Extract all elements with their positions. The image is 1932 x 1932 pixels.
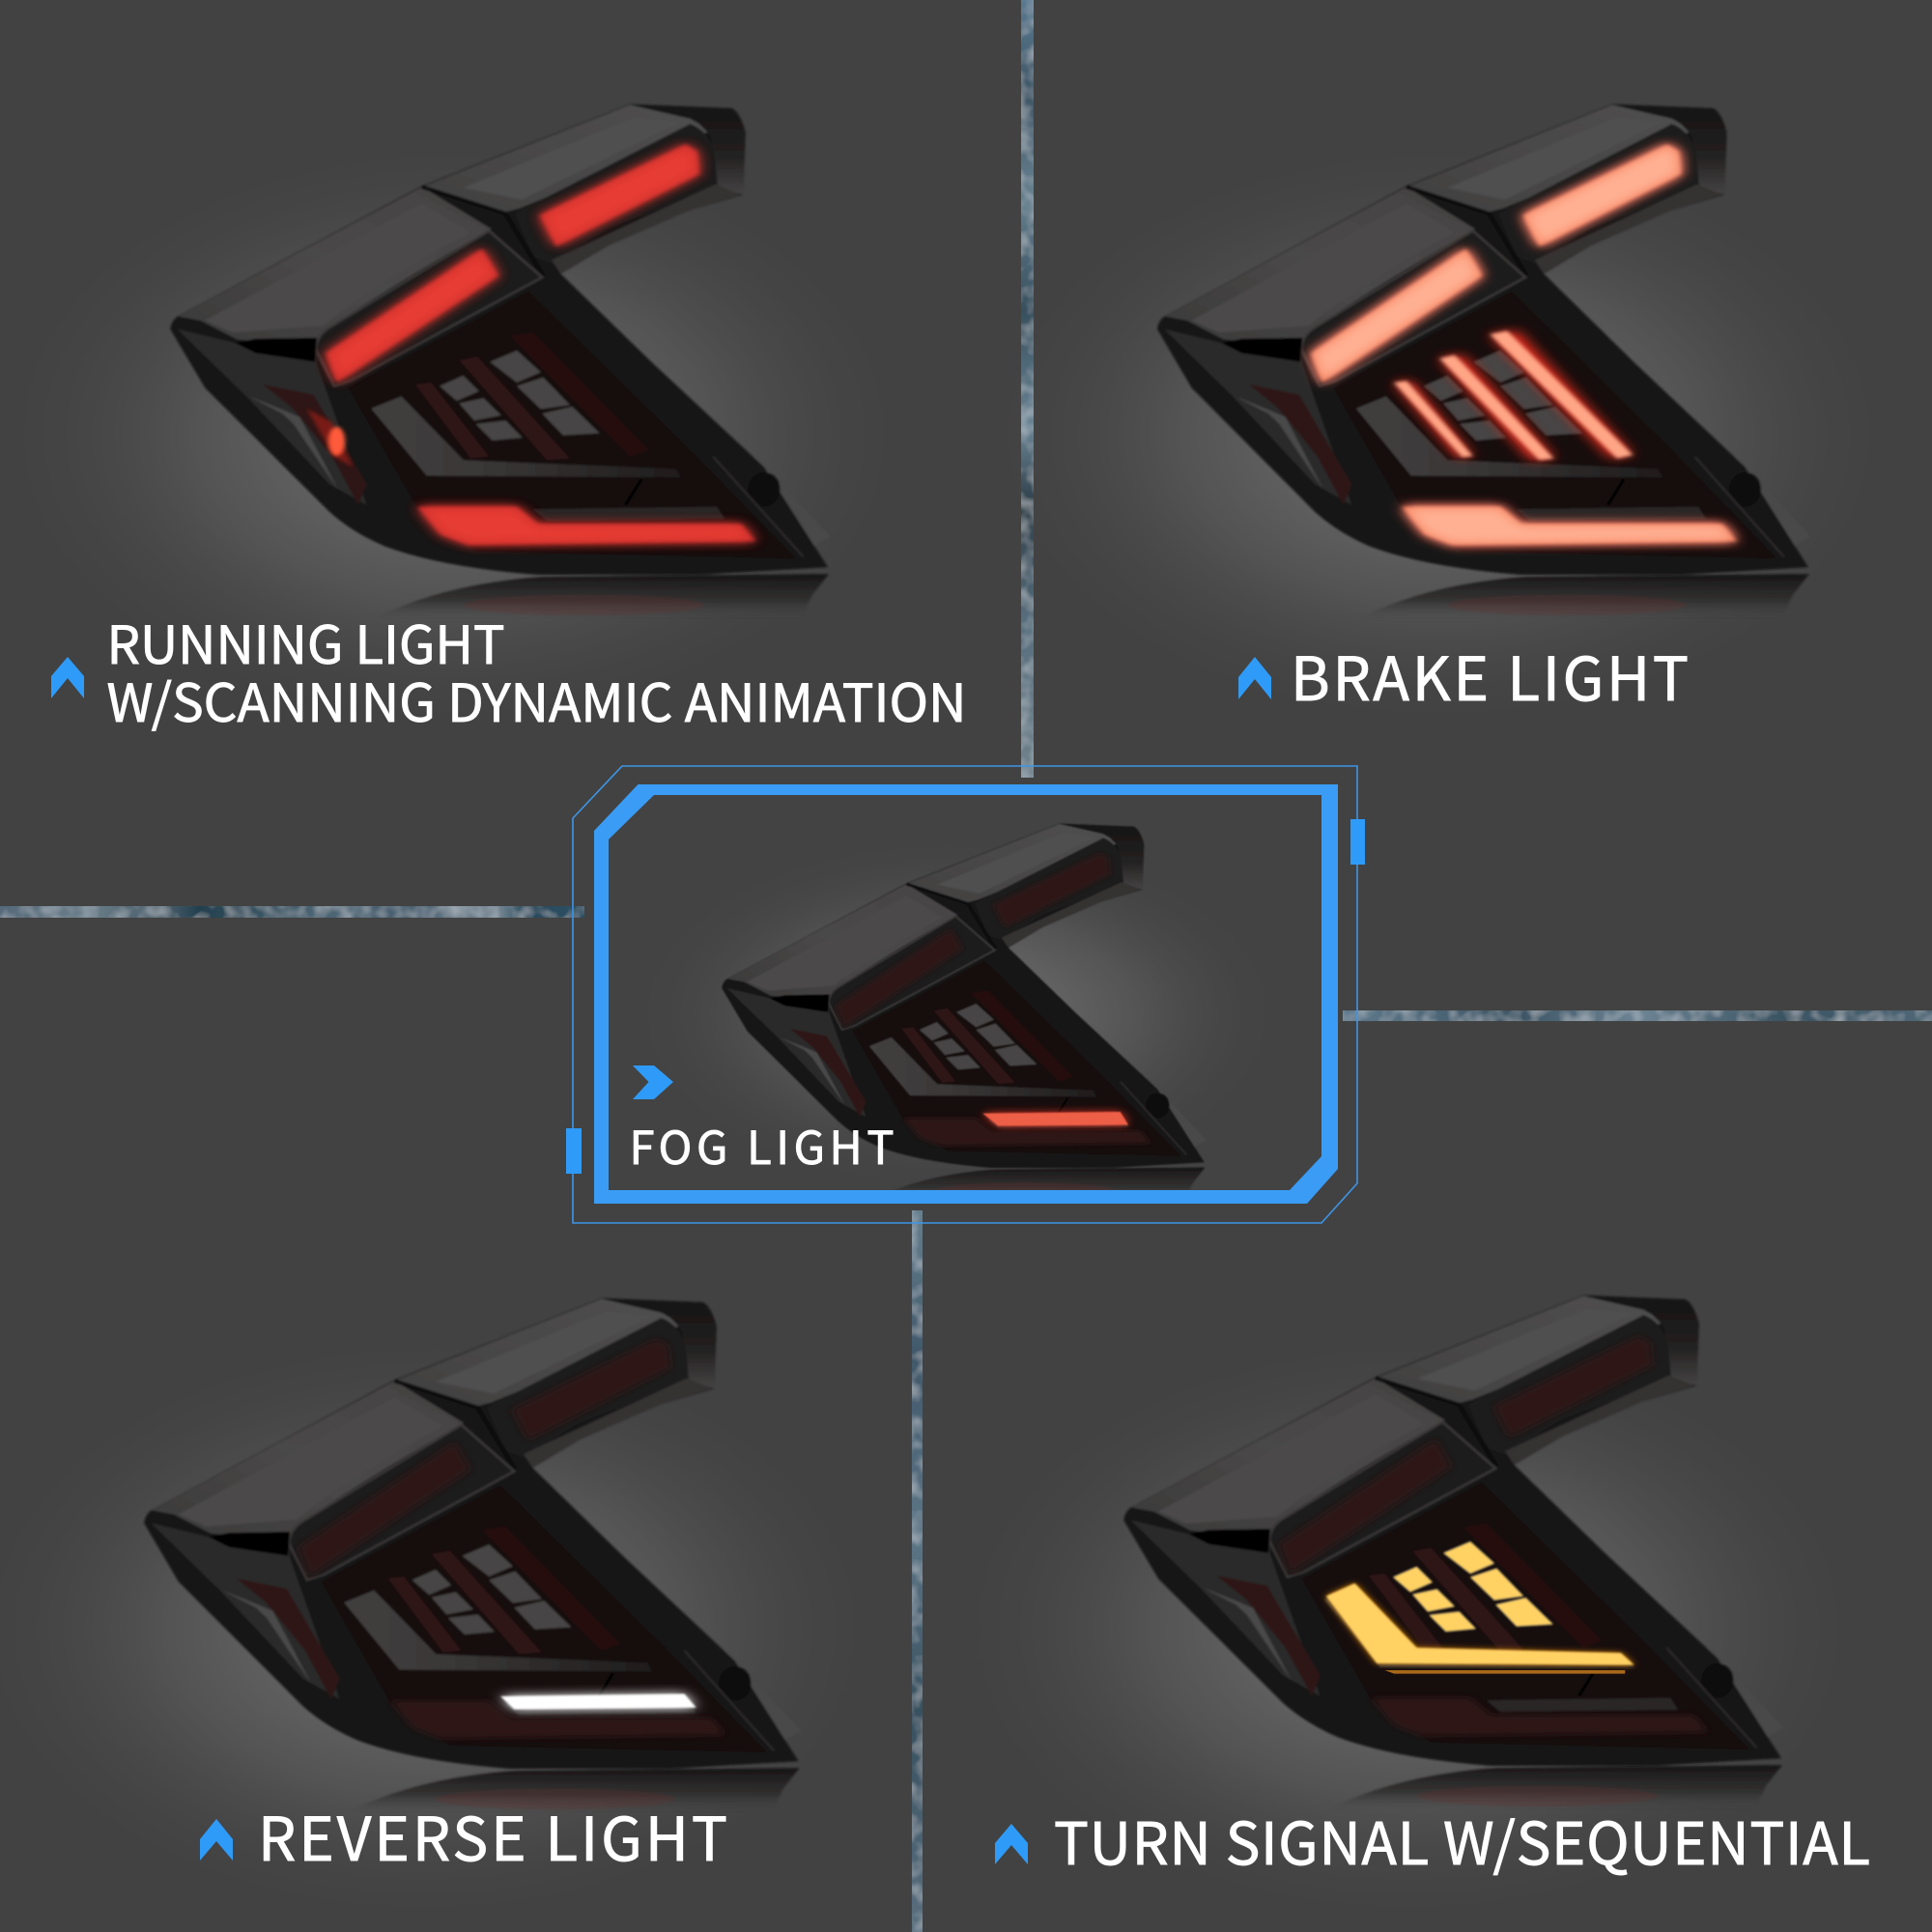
icon: blue up chevron xyxy=(200,1819,233,1861)
tail light: reverse light xyxy=(144,1298,801,1812)
separator: top vertical xyxy=(1021,0,1034,778)
tail light: brake light xyxy=(1157,104,1811,618)
heading: REVERSE LIGHT xyxy=(258,1791,727,1878)
separator: bottom vertical xyxy=(912,1210,923,1932)
separator: right horizontal xyxy=(1343,1010,1932,1021)
heading line two: W/SCANNING DYNAMIC ANIMATION xyxy=(106,661,966,737)
icon: blue up chevron xyxy=(995,1824,1028,1864)
tail light: running light xyxy=(170,104,831,618)
separator: left horizontal xyxy=(0,906,584,918)
tail light: turn signal xyxy=(1123,1295,1784,1809)
icon: blue up chevron xyxy=(1238,657,1271,699)
label: running light xyxy=(51,603,966,737)
label: reverse light xyxy=(200,1791,727,1878)
heading: TURN SIGNAL W/SEQUENTIAL xyxy=(1054,1798,1870,1882)
heading line one: RUNNING LIGHT xyxy=(106,603,504,679)
frame: thin outer outline xyxy=(573,766,1357,1223)
label: turn signal xyxy=(995,1798,1870,1882)
glow: running light panel xyxy=(0,135,918,734)
label: brake light xyxy=(1238,631,1689,718)
frame tab: right xyxy=(1350,819,1365,865)
glow: turn signal panel xyxy=(945,1329,1872,1928)
label: fog light xyxy=(630,1065,895,1178)
icon: blue right chevron xyxy=(633,1065,673,1099)
frame tab: left xyxy=(566,1128,582,1174)
icon: blue up chevron xyxy=(51,657,84,698)
glow: fog light panel xyxy=(628,836,1285,1193)
glow: brake light panel xyxy=(976,135,1903,734)
frame: thick blue border xyxy=(594,784,1338,1204)
panel: fog light frame background xyxy=(609,795,1321,1190)
glow: reverse light panel xyxy=(0,1329,889,1928)
heading: FOG LIGHT xyxy=(630,1111,895,1178)
tail light: fog light xyxy=(722,823,1207,1200)
heading: BRAKE LIGHT xyxy=(1291,631,1689,718)
